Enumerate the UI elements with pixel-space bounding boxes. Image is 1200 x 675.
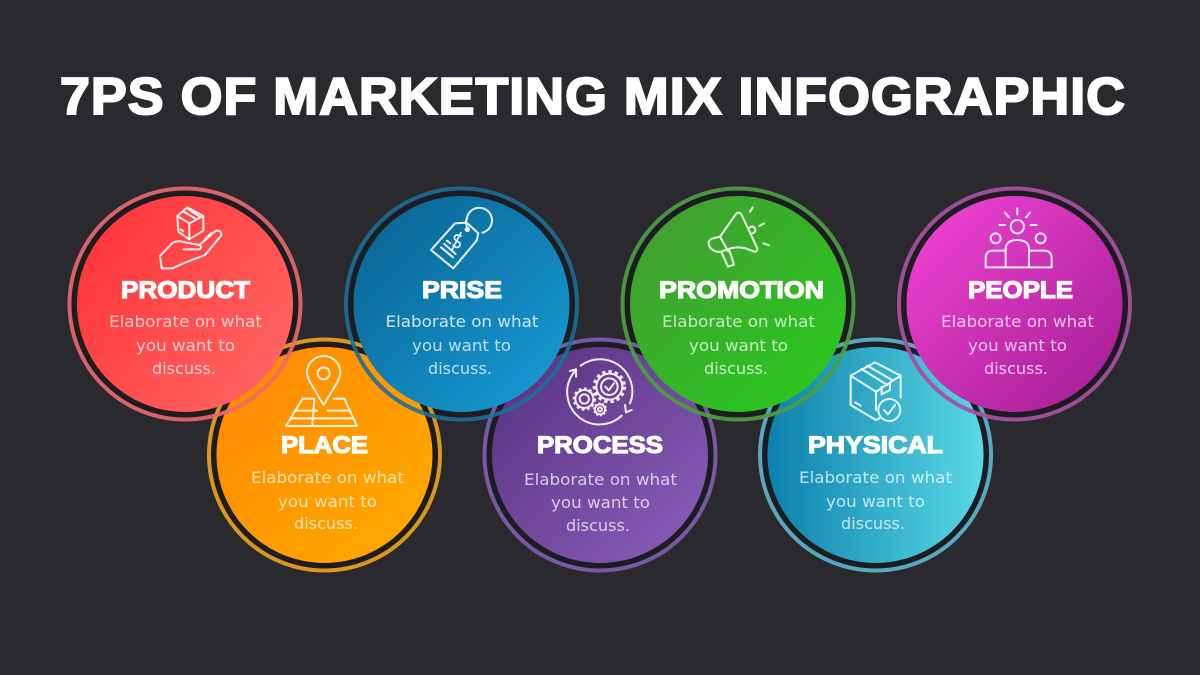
text: physical description [799, 468, 952, 533]
icon: gears [567, 359, 632, 424]
text: people description [941, 312, 1094, 378]
panel: product [70, 188, 300, 420]
icon: hand holding box [160, 207, 221, 268]
text: place description: discuss. [294, 514, 358, 533]
text: process description: Elaborate on what [524, 470, 677, 489]
heading: product: PRODUCT [121, 277, 250, 304]
text: physical description: you want to [826, 492, 925, 511]
heading: prise: PRISE [422, 277, 502, 304]
text: product description [109, 312, 262, 378]
text: place description: you want to [278, 492, 377, 511]
text: place description [251, 468, 404, 533]
text: place description: Elaborate on what [251, 468, 404, 487]
panel: people [899, 188, 1130, 420]
heading: process: PROCESS [537, 432, 663, 459]
panel: physical [760, 340, 991, 570]
icon: price tag [431, 208, 492, 268]
text: promotion description: Elaborate on what [662, 312, 815, 331]
panel: promotion [622, 188, 854, 420]
heading: promotion: PROMOTION [659, 277, 824, 304]
text: process description [524, 470, 677, 535]
text: prise description [386, 312, 538, 378]
panel: place [209, 340, 440, 570]
panel: prise [346, 188, 577, 420]
heading: place: PLACE [281, 432, 368, 459]
text: people description: Elaborate on what [941, 312, 1094, 331]
text: people description: discuss. [984, 359, 1048, 378]
icon: megaphone [709, 207, 769, 267]
text: product description: you want to [136, 336, 235, 355]
panel: process [484, 340, 716, 570]
text: promotion description: you want to [689, 336, 788, 355]
text: physical description: discuss. [841, 514, 905, 533]
text: prise description: you want to [412, 336, 511, 355]
text: process description: discuss. [566, 516, 630, 535]
text: prise description: Elaborate on what [386, 312, 538, 331]
text: product description: Elaborate on what [109, 312, 262, 331]
text: promotion description: discuss. [704, 359, 768, 378]
text: prise description: discuss. [428, 359, 492, 378]
text: product description: discuss. [152, 359, 216, 378]
text: process description: you want to [551, 493, 650, 512]
heading: people: PEOPLE [968, 277, 1073, 304]
text: physical description: Elaborate on what [799, 468, 952, 487]
text: promotion description [662, 312, 815, 378]
icon: box with check [851, 362, 901, 421]
icon: map pin [286, 356, 357, 426]
text: people description: you want to [968, 336, 1067, 355]
icon: people group [986, 208, 1052, 267]
title: 7PS OF MARKETING MIX INFOGRAPHIC [60, 68, 1126, 126]
heading: physical: PHYSICAL [808, 432, 943, 459]
